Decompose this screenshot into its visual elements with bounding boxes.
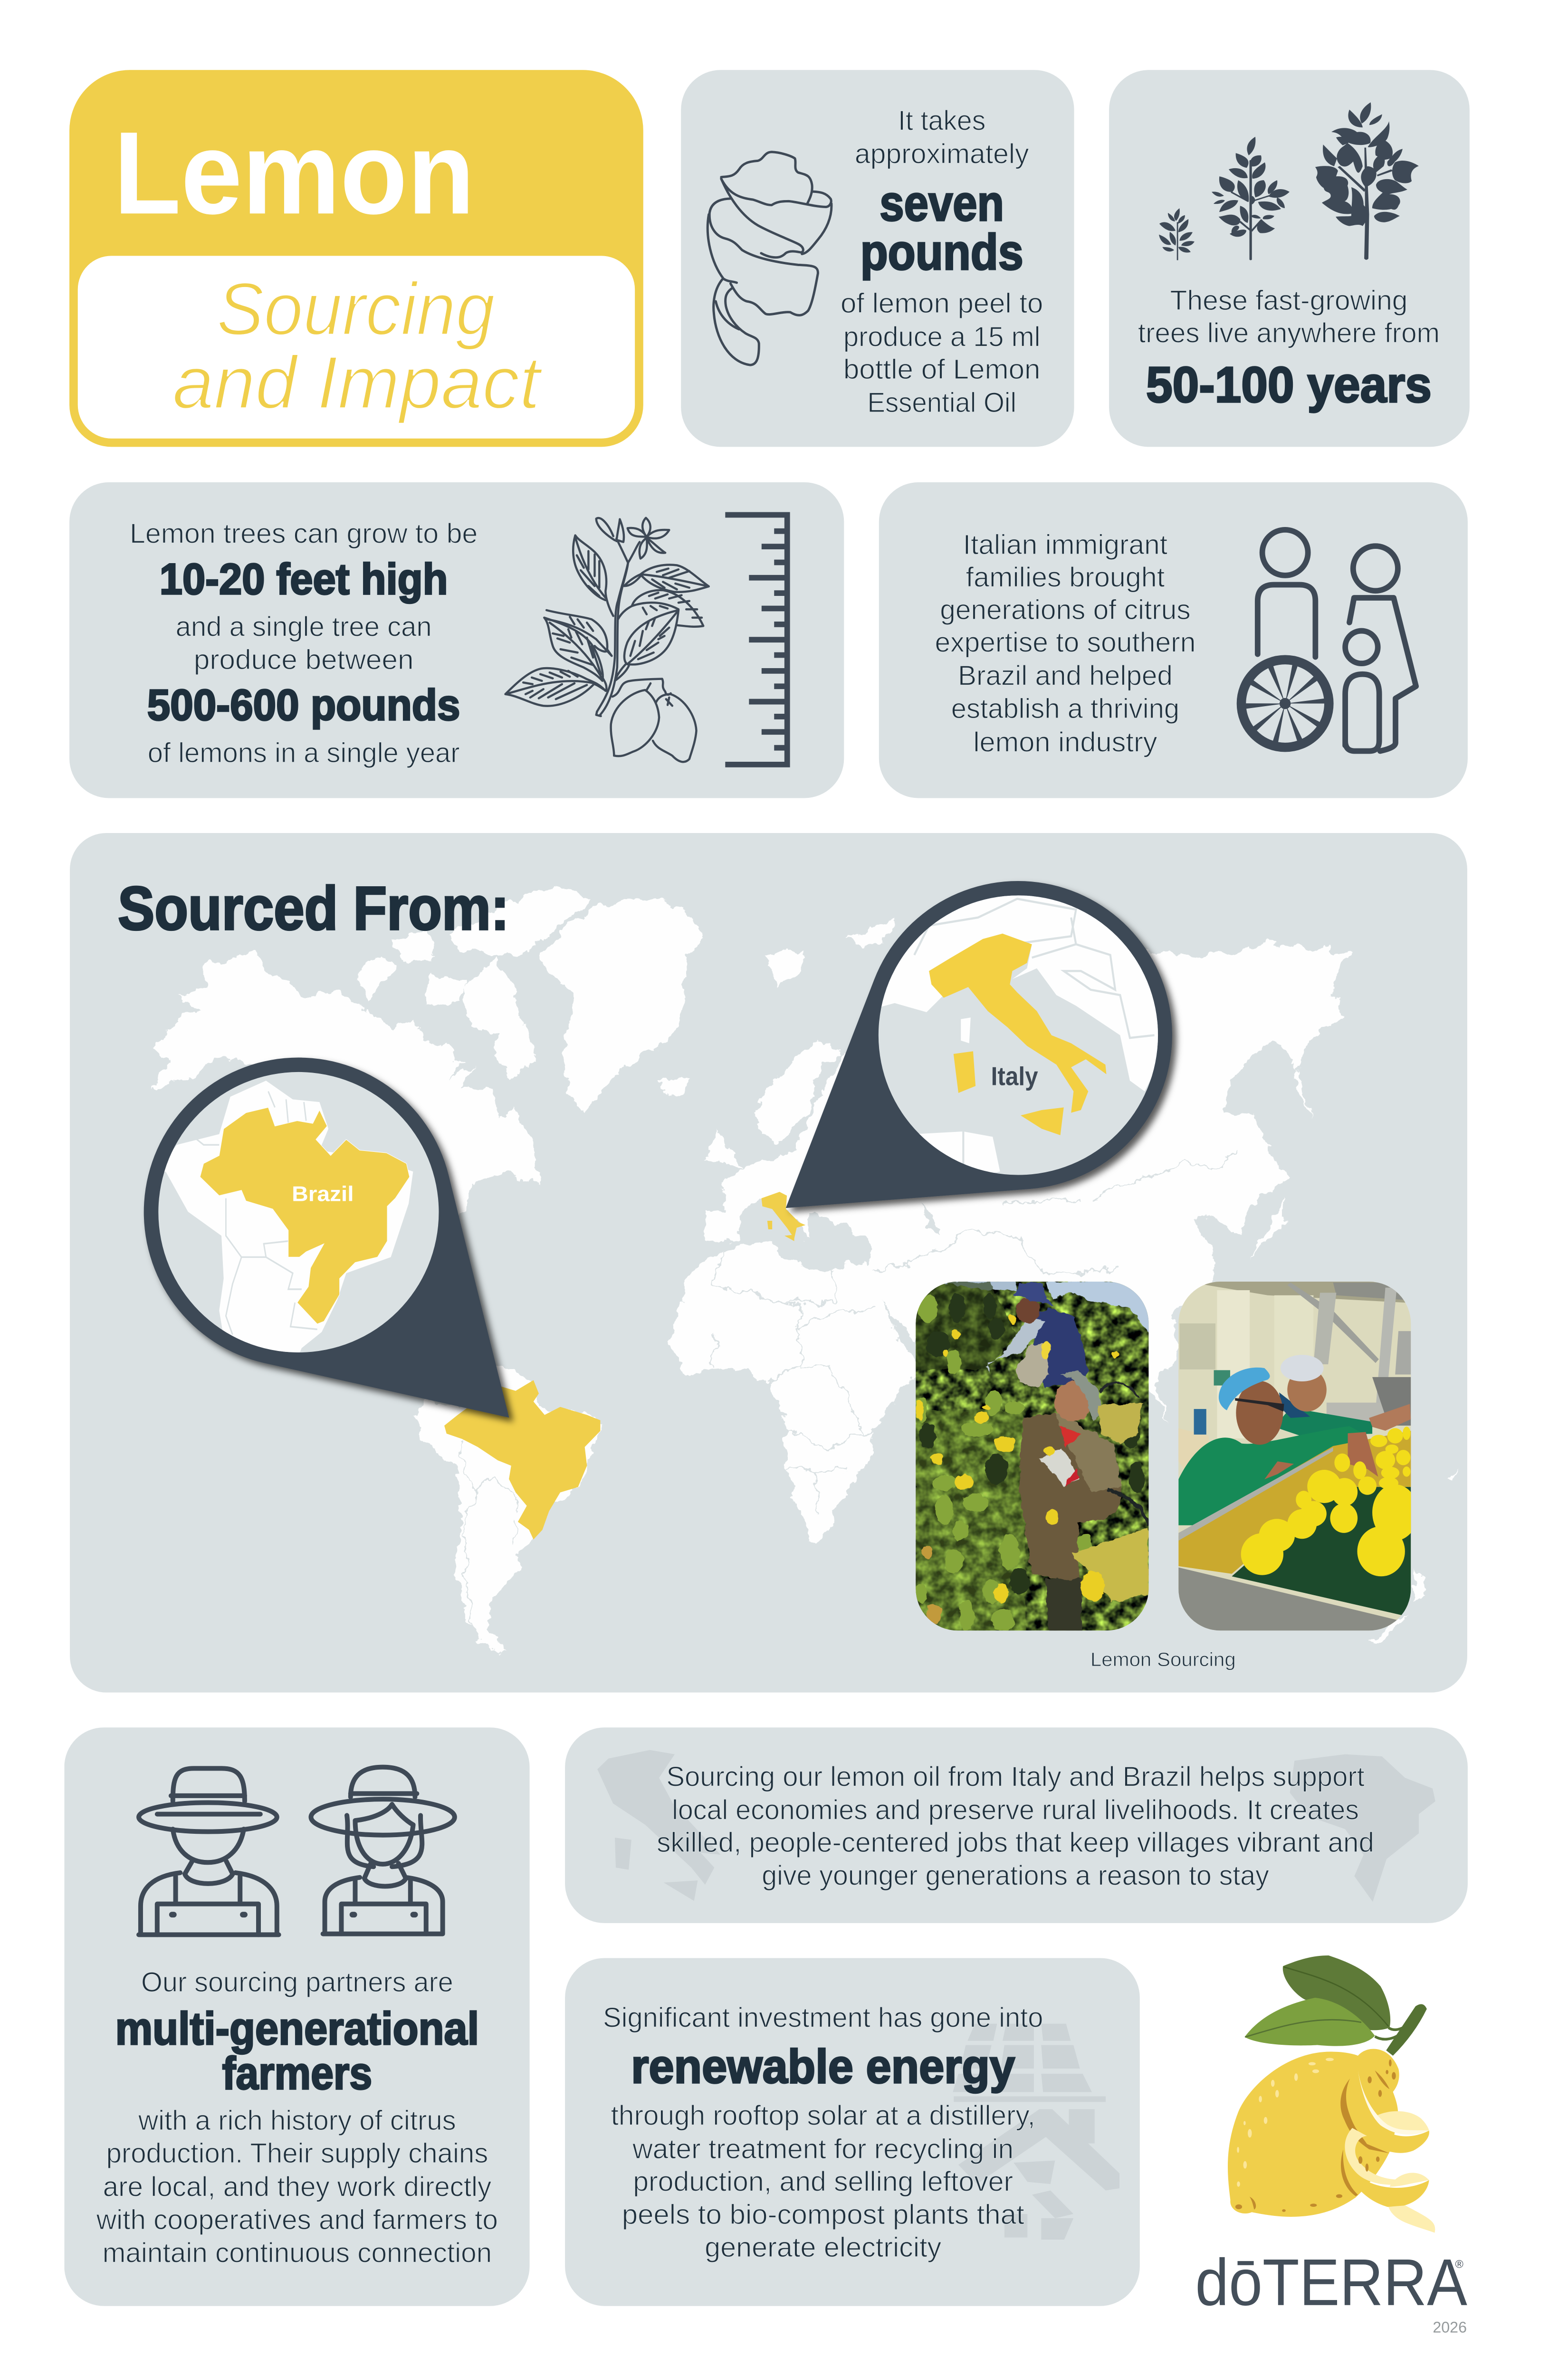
text: it takes seven pounds [841, 105, 1043, 418]
text: farmers: are local, and they work directly [103, 2171, 492, 2202]
icon: family with citrus wheel [1240, 530, 1416, 751]
text: farmers: farmers [222, 2048, 372, 2099]
worker back [1274, 1408, 1372, 1436]
photo: lemon pickers in orchard [915, 1281, 1150, 1633]
panel: sourced from map [70, 833, 1467, 1693]
text: height and yield: of lemons in a single year [148, 738, 460, 768]
text: height and yield: Lemon trees can grow to be [130, 518, 478, 549]
text: renewable energy: water treatment for recycling in [632, 2134, 1013, 2165]
text: renewable energy: generate electricity [705, 2232, 942, 2263]
text: immigrant families: families brought [966, 562, 1165, 593]
text: renewable energy: Significant investment has gone into [603, 2002, 1043, 2033]
icon: lemon peel spiral [708, 152, 832, 365]
map highlight: Brazil [444, 1380, 600, 1540]
photo: lemon processing line [1176, 1280, 1418, 1633]
text: height and yield [130, 518, 478, 768]
logo: registered mark: ® [1455, 2258, 1463, 2270]
text: local economies [657, 1762, 1374, 1891]
icon: three growing trees [1159, 102, 1419, 260]
leaves and stem [1244, 1955, 1427, 2056]
text: farmers: Our sourcing partners are [141, 1967, 453, 1998]
icon: height ruler [725, 515, 787, 765]
panel: tree lifespan [1109, 70, 1470, 447]
text: tree lifespan: trees live anywhere from [1138, 318, 1440, 349]
text: tree lifespan: 50-100 years [1146, 357, 1432, 413]
illustration: lemon with spiral peel [1228, 1955, 1435, 2233]
panel: multi-generational farmers [64, 1727, 530, 2306]
text: renewable energy [603, 2002, 1043, 2263]
small tree [1159, 208, 1195, 260]
conveyor [1178, 1431, 1412, 1574]
lemons [1241, 1427, 1418, 1576]
text: it takes seven pounds: of lemon peel to [841, 288, 1043, 319]
text: it takes seven pounds: pounds [860, 224, 1023, 280]
lemons on tree [916, 1315, 1119, 1623]
panel: renewable energy [565, 1958, 1140, 2306]
title: Lemon: Lemon [114, 107, 475, 239]
eurasia and africa [669, 920, 1458, 1645]
text: renewable energy: production, and selling leftover [633, 2166, 1013, 2197]
text: farmers [96, 1967, 498, 2269]
text: local economies: Sourcing our lemon oil from Italy and Brazil helps support [666, 1762, 1365, 1792]
watermark: solar panel and recycling [953, 2024, 1119, 2240]
text: immigrant families: Italian immigrant [963, 529, 1167, 560]
logo: doTERRA: dōTERRA [1195, 2246, 1467, 2319]
peel spiral [1340, 2070, 1435, 2233]
text: it takes seven pounds: bottle of Lemon [843, 354, 1041, 385]
subtitle [172, 268, 543, 424]
text: farmers: maintain continuous connection [103, 2238, 492, 2269]
text: farmers: multi-generational [115, 2003, 479, 2054]
subtitle: and Impact [172, 341, 543, 424]
lemon pores [1237, 2058, 1334, 2187]
americas [150, 887, 705, 1653]
lemon body [1228, 2049, 1399, 2217]
farmer bottom [1019, 1413, 1122, 1584]
text: immigrant families: expertise to southern [935, 627, 1195, 658]
text: it takes seven pounds: produce a 15 ml [843, 322, 1041, 353]
text: farmers: with cooperatives and farmers to [96, 2204, 498, 2235]
panel: local economies [565, 1727, 1468, 1923]
text: height and yield: 500-600 pounds [147, 680, 460, 729]
text: local economies: give younger generations a reason to stay [762, 1860, 1269, 1891]
text: immigrant families: generations of citrus [940, 594, 1191, 625]
text: it takes seven pounds: approximately [855, 138, 1029, 169]
farmer top [1033, 1308, 1089, 1389]
worker front [1178, 1426, 1362, 1525]
panel: tree height and yield [69, 482, 844, 798]
baskets [1098, 1403, 1142, 1444]
text: it takes seven pounds: It takes [898, 105, 985, 136]
text: tree lifespan: These fast-growing [1170, 285, 1407, 316]
text: renewable energy: peels to bio-compost plants that [622, 2199, 1024, 2230]
text: immigrant families [935, 529, 1195, 757]
panel: seven pounds of peel [681, 70, 1074, 447]
text: it takes seven pounds: Essential Oil [867, 387, 1016, 418]
text: immigrant families: lemon industry [973, 727, 1157, 757]
watermark: Italy and Brazil [597, 1750, 1435, 1902]
heading: Sourced From: Sourced From: [118, 874, 509, 943]
caption: Lemon Sourcing: Lemon Sourcing [1090, 1648, 1236, 1670]
subtitle: Sourcing [217, 268, 495, 351]
text: renewable energy: through rooftop solar at a distillery, [611, 2100, 1035, 2131]
map pin: Brazil [144, 1057, 509, 1418]
world map [150, 887, 1458, 1653]
icon: lemon branch [506, 518, 709, 762]
text: height and yield: 10-20 feet high [160, 555, 448, 604]
text: height and yield: and a single tree can [176, 611, 432, 642]
text: immigrant families: Brazil and helped [958, 660, 1173, 691]
label: Italy: Italy [991, 1061, 1038, 1091]
text: it takes seven pounds: seven [880, 175, 1004, 231]
panel: title [69, 70, 643, 447]
panel: Italian immigrant families [879, 482, 1468, 798]
text: immigrant families: establish a thriving [951, 693, 1179, 724]
year: 2026: 2026 [1433, 2319, 1467, 2336]
female farmer [311, 1767, 455, 1934]
map pin: Italy [786, 872, 1172, 1208]
text: farmers: with a rich history of citrus [138, 2105, 456, 2136]
mid tree [1212, 137, 1290, 260]
label: Brazil: Brazil [292, 1182, 354, 1206]
text: local economies: local economies and preserve rural livelihoods. It creates [672, 1794, 1359, 1825]
icon: farmer couple [139, 1767, 455, 1935]
text: local economies: skilled, people-centered jobs that keep villages vibrant and [657, 1827, 1374, 1858]
text: renewable energy: renewable energy [631, 2040, 1015, 2093]
large tree [1315, 102, 1419, 260]
male farmer [139, 1768, 279, 1935]
text: farmers: production. Their supply chains [106, 2138, 488, 2169]
text: tree lifespan [1138, 285, 1440, 413]
text: height and yield: produce between [194, 644, 414, 675]
map highlight: Italy [761, 1192, 805, 1241]
